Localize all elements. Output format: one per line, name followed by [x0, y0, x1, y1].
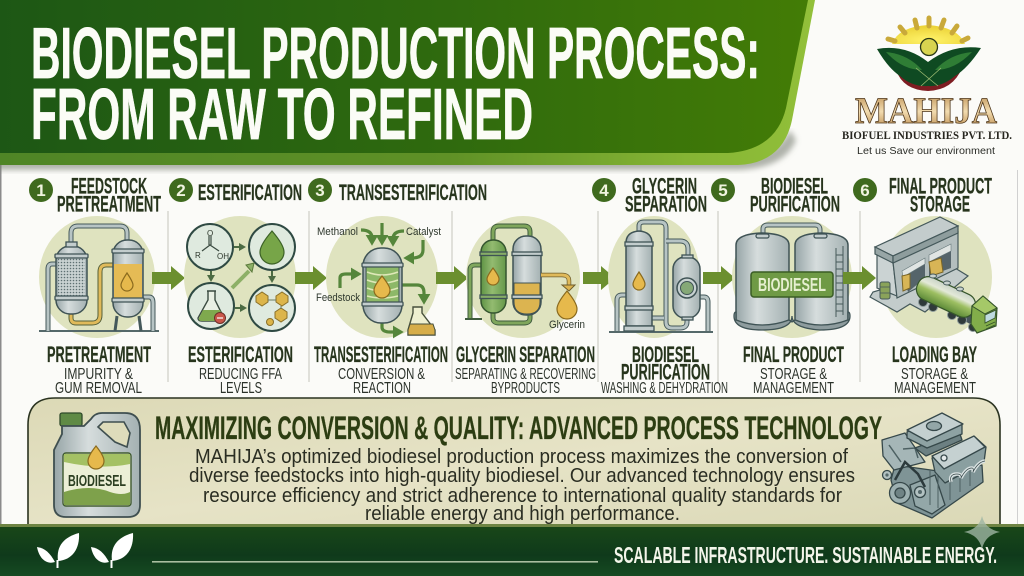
step heading: ESTERIFICATION — [198, 180, 302, 205]
badge 3: 3 — [315, 181, 325, 200]
description: LEVELS — [220, 380, 262, 397]
panel body text: reliable energy and high performance. — [365, 503, 680, 525]
icon: esterification chemistry circles: R — [195, 251, 201, 260]
icon: warehouse and tanker truck — [870, 216, 997, 338]
icon: transesterification reactor — [316, 216, 441, 338]
label: BIODIESEL — [632, 342, 699, 367]
arrow 6 — [843, 266, 876, 290]
description: MANAGEMENT — [753, 380, 834, 397]
step heading: SEPARATION — [625, 192, 707, 216]
step 1: feedstock pretreatment — [29, 174, 161, 397]
tank label: BIODIESEL — [758, 275, 826, 295]
description: SEPARATING & RECOVERING — [455, 366, 596, 383]
icon: pretreatment vessels — [39, 216, 159, 338]
step heading — [889, 174, 992, 216]
description: BYPRODUCTS — [491, 380, 560, 397]
badge 2 — [169, 178, 193, 202]
badge 3 — [308, 178, 332, 202]
description: GUM REMOVAL — [55, 380, 142, 397]
label: PRETREATMENT — [47, 342, 151, 367]
arrow 3 — [436, 266, 468, 290]
methanol label: Methanol — [317, 226, 358, 238]
badge 6 — [853, 178, 877, 202]
description: WASHING & DEHYDRATION — [601, 380, 728, 397]
icon: leaf sprout — [37, 533, 79, 568]
icon: biodiesel jug — [54, 413, 140, 517]
panel body text: diverse feedstocks into high-quality biodiesel. Our advanced technology ensures — [189, 465, 855, 487]
step heading: FEEDSTOCK — [71, 174, 147, 198]
description — [199, 366, 282, 397]
step 4: glycerin separation heading and biodiesel purification illustration — [592, 174, 728, 397]
arrow 1 — [152, 266, 185, 290]
label: FINAL PRODUCT — [743, 342, 844, 367]
step 5: biodiesel purification heading and storage tanks — [711, 174, 852, 397]
panel body text: resource efficiency and strict adherence to international quality standards for — [203, 485, 842, 507]
icon: esterification chemistry circles — [184, 216, 296, 338]
step 2: esterification — [169, 178, 302, 397]
panel body text — [189, 446, 855, 525]
label: GLYCERIN SEPARATION — [456, 342, 595, 367]
description — [338, 366, 425, 397]
badge 2: 2 — [176, 181, 186, 200]
icon: glycerin separators — [465, 216, 585, 338]
description — [55, 366, 142, 397]
label: TRANSESTERIFICATION — [314, 342, 448, 367]
wordmark: MAHIJA — [855, 91, 997, 132]
arrow 2 — [295, 266, 327, 290]
title — [31, 14, 760, 155]
company name: BIOFUEL INDUSTRIES PVT. LTD. — [842, 130, 1012, 142]
panel body text: MAHIJA’s optimized biodiesel production process maximizes the conversion of — [195, 446, 848, 468]
label: PURIFICATION — [621, 360, 710, 384]
description: STORAGE & — [760, 366, 827, 383]
description: IMPURITY & — [64, 366, 134, 383]
step heading: BIODIESEL — [761, 174, 828, 198]
step heading — [57, 174, 161, 216]
arrow 4 — [583, 266, 615, 290]
description — [455, 366, 596, 397]
icon: esterification chemistry circles: OH — [217, 252, 229, 261]
step heading: TRANSESTERIFICATION — [339, 180, 487, 205]
step heading: PURIFICATION — [750, 192, 840, 216]
icon: leaf sprout — [91, 533, 133, 568]
description: CONVERSION & — [338, 366, 425, 383]
description: STORAGE & — [901, 366, 968, 383]
step heading — [750, 174, 840, 216]
sparkle mark — [964, 516, 1000, 549]
badge 4: 4 — [599, 181, 609, 200]
step heading: PRETREATMENT — [57, 192, 161, 216]
dividers — [168, 211, 860, 382]
step 3: transesterification — [308, 178, 487, 397]
step: glycerin separation illustration — [455, 216, 596, 397]
step heading — [625, 174, 707, 216]
feedstock label: Feedstock — [316, 292, 360, 304]
step heading: GLYCERIN — [632, 174, 697, 198]
jug label: BIODIESEL — [68, 473, 126, 490]
badge 1: 1 — [36, 181, 46, 200]
icon: esterification chemistry circles: O — [207, 229, 213, 238]
glycerin label: Glycerin — [549, 319, 585, 331]
header banner — [0, 0, 815, 170]
arrow 5 — [703, 266, 735, 290]
label — [621, 342, 710, 384]
footer bar — [0, 524, 1024, 576]
description — [753, 366, 834, 397]
icon: engine — [882, 413, 986, 518]
label: ESTERIFICATION — [188, 342, 293, 367]
icon: biodiesel storage tanks — [732, 216, 852, 338]
badge 4 — [592, 178, 616, 202]
icon: sun and leaves — [877, 18, 981, 91]
title: FROM RAW TO REFINED — [31, 75, 533, 155]
tagline: Let us Save our environment — [857, 145, 995, 157]
logo: Mahija Biofuel Industries — [842, 18, 1012, 157]
badge 5: 5 — [718, 181, 728, 200]
description: REACTION — [353, 380, 411, 397]
description: REDUCING FFA — [199, 366, 282, 383]
description — [894, 366, 976, 397]
description: MANAGEMENT — [894, 380, 976, 397]
badge 1 — [29, 178, 53, 202]
panel: advanced process technology — [28, 398, 1000, 530]
catalyst label: Catalyst — [406, 226, 441, 238]
icon: purification columns — [608, 216, 713, 338]
badge 6: 6 — [860, 181, 870, 200]
step 6: final product storage — [853, 174, 997, 397]
step heading: STORAGE — [910, 192, 970, 216]
badge 5 — [711, 178, 735, 202]
